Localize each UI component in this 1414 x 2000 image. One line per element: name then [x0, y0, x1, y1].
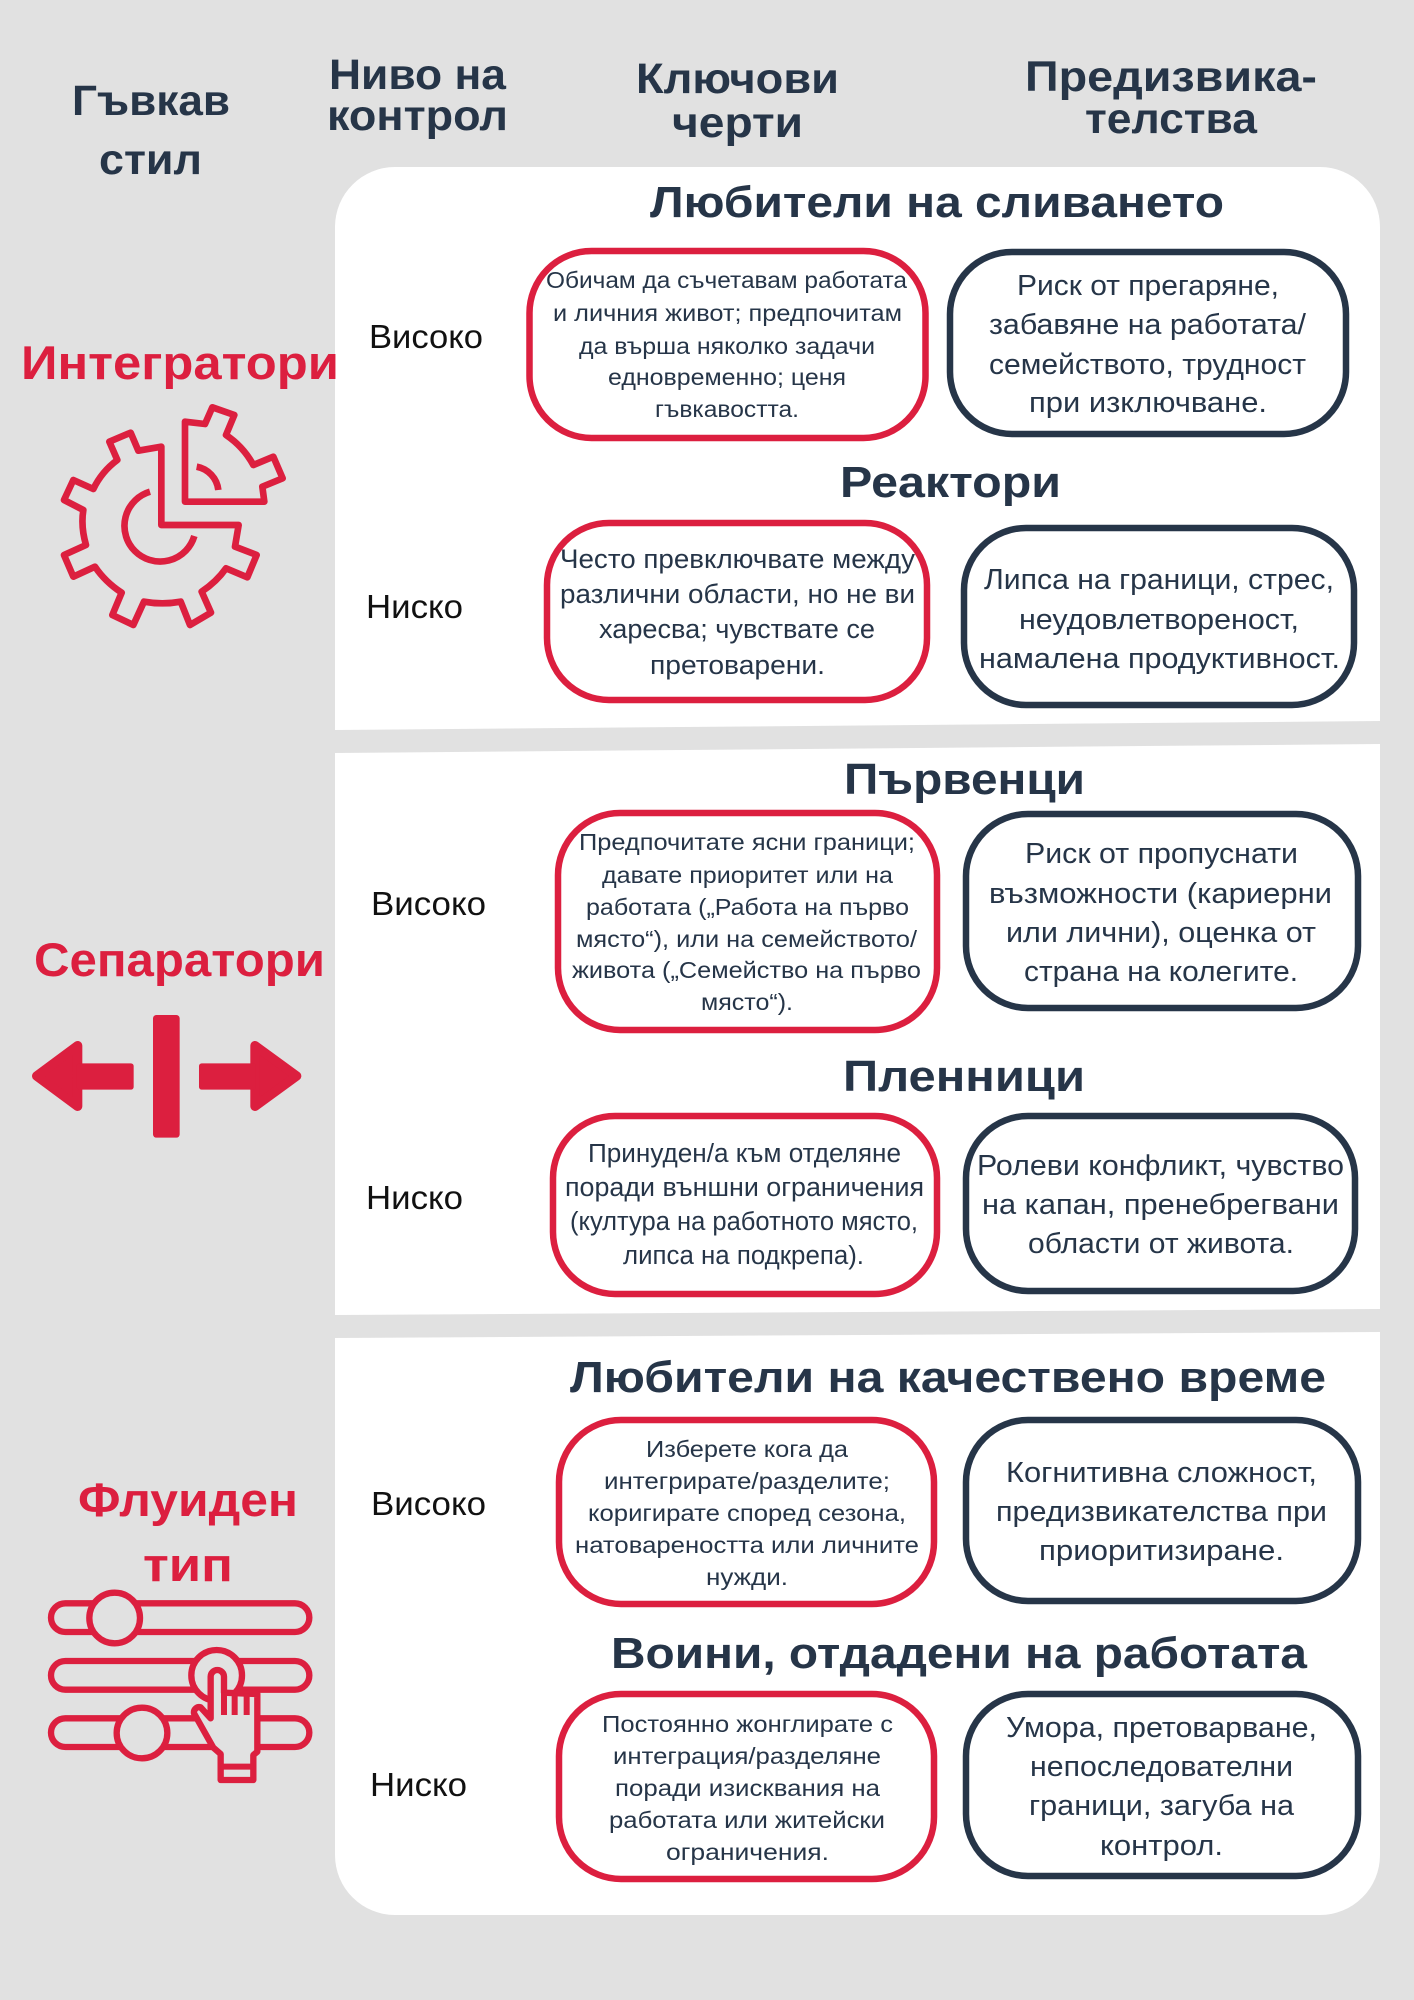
key traits box: quality time lovers [559, 1420, 934, 1604]
key traits box: firsters: давате приоритет или на [602, 862, 894, 888]
category label: separators: Сепаратори [34, 934, 325, 987]
challenges box: fusion lovers: семейството, трудност [989, 349, 1306, 381]
key traits box: captives: поради външни ограничения [565, 1174, 924, 1202]
challenges box: captives: области от живота. [1028, 1228, 1294, 1260]
header: challenges: телства [1085, 95, 1258, 143]
key traits box: reactors: претоварени. [650, 650, 825, 680]
key traits box: work-devoted warriors: поради изисквания на [615, 1775, 881, 1801]
key traits box: reactors: Често превключвате между [560, 544, 916, 574]
challenges box: firsters: възможности (кариерни [989, 878, 1332, 910]
header: flexible style: Гъвкав [72, 77, 230, 125]
challenges box: reactors [964, 528, 1354, 705]
key traits box: quality time lovers: натовареността или личните [575, 1532, 919, 1558]
challenges box: reactors: Липса на граници, стрес, [984, 564, 1334, 596]
control level: low: Ниско [370, 1766, 467, 1803]
panel: fluid type [51, 1332, 1380, 1915]
sub-type title: fusion lovers: Любители на сливането [650, 178, 1224, 227]
header: challenges: Предизвика- [1025, 53, 1317, 101]
key traits box: reactors: различни области, но не ви [560, 579, 915, 609]
header: control level: контрол [327, 92, 508, 140]
key traits box: fusion lovers: да върша няколко задачи [579, 333, 875, 359]
category label: integrators: Интегратори [21, 337, 339, 390]
key traits box: firsters: място“), или на семейството/ [576, 926, 917, 952]
key traits box: firsters: място“). [701, 989, 793, 1015]
control level: low: Ниско [366, 588, 463, 625]
challenges box: firsters [966, 814, 1358, 1008]
challenges box: quality time lovers: Когнитивна сложност, [1006, 1457, 1317, 1489]
challenges box: captives [966, 1116, 1355, 1291]
key traits box: work-devoted warriors: ограничения. [666, 1839, 829, 1865]
column headers [72, 51, 1317, 184]
challenges box: work-devoted warriors [966, 1694, 1358, 1876]
challenges box: fusion lovers: Риск от прегаряне, [1017, 270, 1279, 302]
header: control level [327, 51, 508, 140]
control level: high: Високо [371, 885, 486, 922]
key traits box: work-devoted warriors: интеграция/разделяне [613, 1743, 881, 1769]
category label: fluid type: тип [143, 1539, 233, 1592]
key traits box: work-devoted warriors [559, 1694, 934, 1879]
header: control level: Ниво на [329, 51, 507, 99]
sub-type title: work-devoted warriors: Воини, отдадени на работата [611, 1629, 1308, 1678]
key traits box: quality time lovers: коригирате според сезона, [588, 1500, 906, 1526]
challenges box: work-devoted warriors: непоследователни [1030, 1751, 1293, 1783]
key traits box: fusion lovers [530, 251, 926, 438]
challenges box: quality time lovers: приоритизиране. [1039, 1535, 1284, 1567]
challenges box: quality time lovers [966, 1420, 1358, 1601]
challenges box: firsters: или лични), оценка от [1006, 917, 1316, 949]
header: key traits: черти [672, 99, 803, 147]
sub-type title: captives: Пленници [843, 1052, 1085, 1101]
key traits box: reactors [547, 523, 927, 700]
key traits box: quality time lovers: Изберете кога да [646, 1436, 849, 1462]
key traits box: captives: липса на подкрепа). [623, 1242, 864, 1270]
challenges box: fusion lovers [950, 252, 1346, 434]
key traits box: captives [553, 1116, 937, 1294]
header: key traits: Ключови [636, 55, 839, 103]
key traits box: fusion lovers: едновременно; ценя [608, 364, 846, 390]
key traits box: fusion lovers: Обичам да съчетавам работата [546, 267, 908, 293]
key traits box: firsters: работата („Работа на първо [586, 894, 909, 920]
challenges box: fusion lovers: забавяне на работата/ [989, 309, 1307, 341]
panel: separators [34, 744, 1380, 1315]
sub-type title: reactors: Реактори [840, 458, 1061, 507]
key traits box: firsters [558, 813, 937, 1030]
challenges box: captives: Ролеви конфликт, чувство [977, 1150, 1344, 1182]
key traits box: captives: Принуден/а към отделяне [588, 1140, 901, 1168]
header: challenges [1025, 53, 1317, 143]
key traits box: firsters: живота („Семейство на първо [572, 957, 921, 983]
control level: low: Ниско [366, 1179, 463, 1216]
sub-type title: firsters: Първенци [844, 755, 1085, 804]
key traits box: work-devoted warriors: Постоянно жонглирате с [602, 1711, 893, 1737]
sub-type title: quality time lovers: Любители на качествено време [570, 1353, 1326, 1402]
key traits box: reactors: харесва; чувствате се [599, 614, 875, 644]
challenges box: reactors: намалена продуктивност. [979, 643, 1340, 675]
challenges box: firsters: страна на колегите. [1024, 956, 1298, 988]
panel: integrators [21, 167, 1380, 730]
control level: high: Високо [371, 1485, 486, 1522]
category label: fluid type [78, 1474, 298, 1592]
key traits box: captives: (култура на работното място, [570, 1208, 918, 1236]
challenges box: fusion lovers: при изключване. [1029, 387, 1267, 419]
header: flexible style: стил [99, 136, 202, 184]
category label: fluid type: Флуиден [78, 1474, 298, 1527]
control level: high: Високо [369, 318, 483, 355]
key traits box: fusion lovers: и личния живот; предпочитам [553, 300, 902, 326]
challenges box: captives: на капан, пренебрегвани [982, 1189, 1339, 1221]
challenges box: work-devoted warriors: контрол. [1100, 1830, 1223, 1862]
header: flexible style [72, 77, 230, 184]
icon: arrows apart from divider [37, 1015, 297, 1138]
icon: sliders with hand [51, 1593, 309, 1780]
icon: gear split with quarter segment [64, 407, 283, 625]
key traits box: quality time lovers: нужди. [706, 1564, 788, 1590]
challenges box: reactors: неудовлетвореност, [1019, 604, 1299, 636]
key traits box: work-devoted warriors: работата или житейски [609, 1807, 885, 1833]
challenges box: quality time lovers: предизвикателства при [996, 1496, 1327, 1528]
header: key traits [636, 55, 839, 147]
key traits box: fusion lovers: гъвкавостта. [655, 396, 799, 422]
key traits box: firsters: Предпочитате ясни граници; [579, 829, 915, 855]
challenges box: firsters: Риск от пропуснати [1025, 838, 1298, 870]
challenges box: work-devoted warriors: граници, загуба на [1029, 1790, 1295, 1822]
challenges box: work-devoted warriors: Умора, претоварване, [1006, 1712, 1317, 1744]
key traits box: quality time lovers: интегрирате/разделите; [604, 1468, 890, 1494]
